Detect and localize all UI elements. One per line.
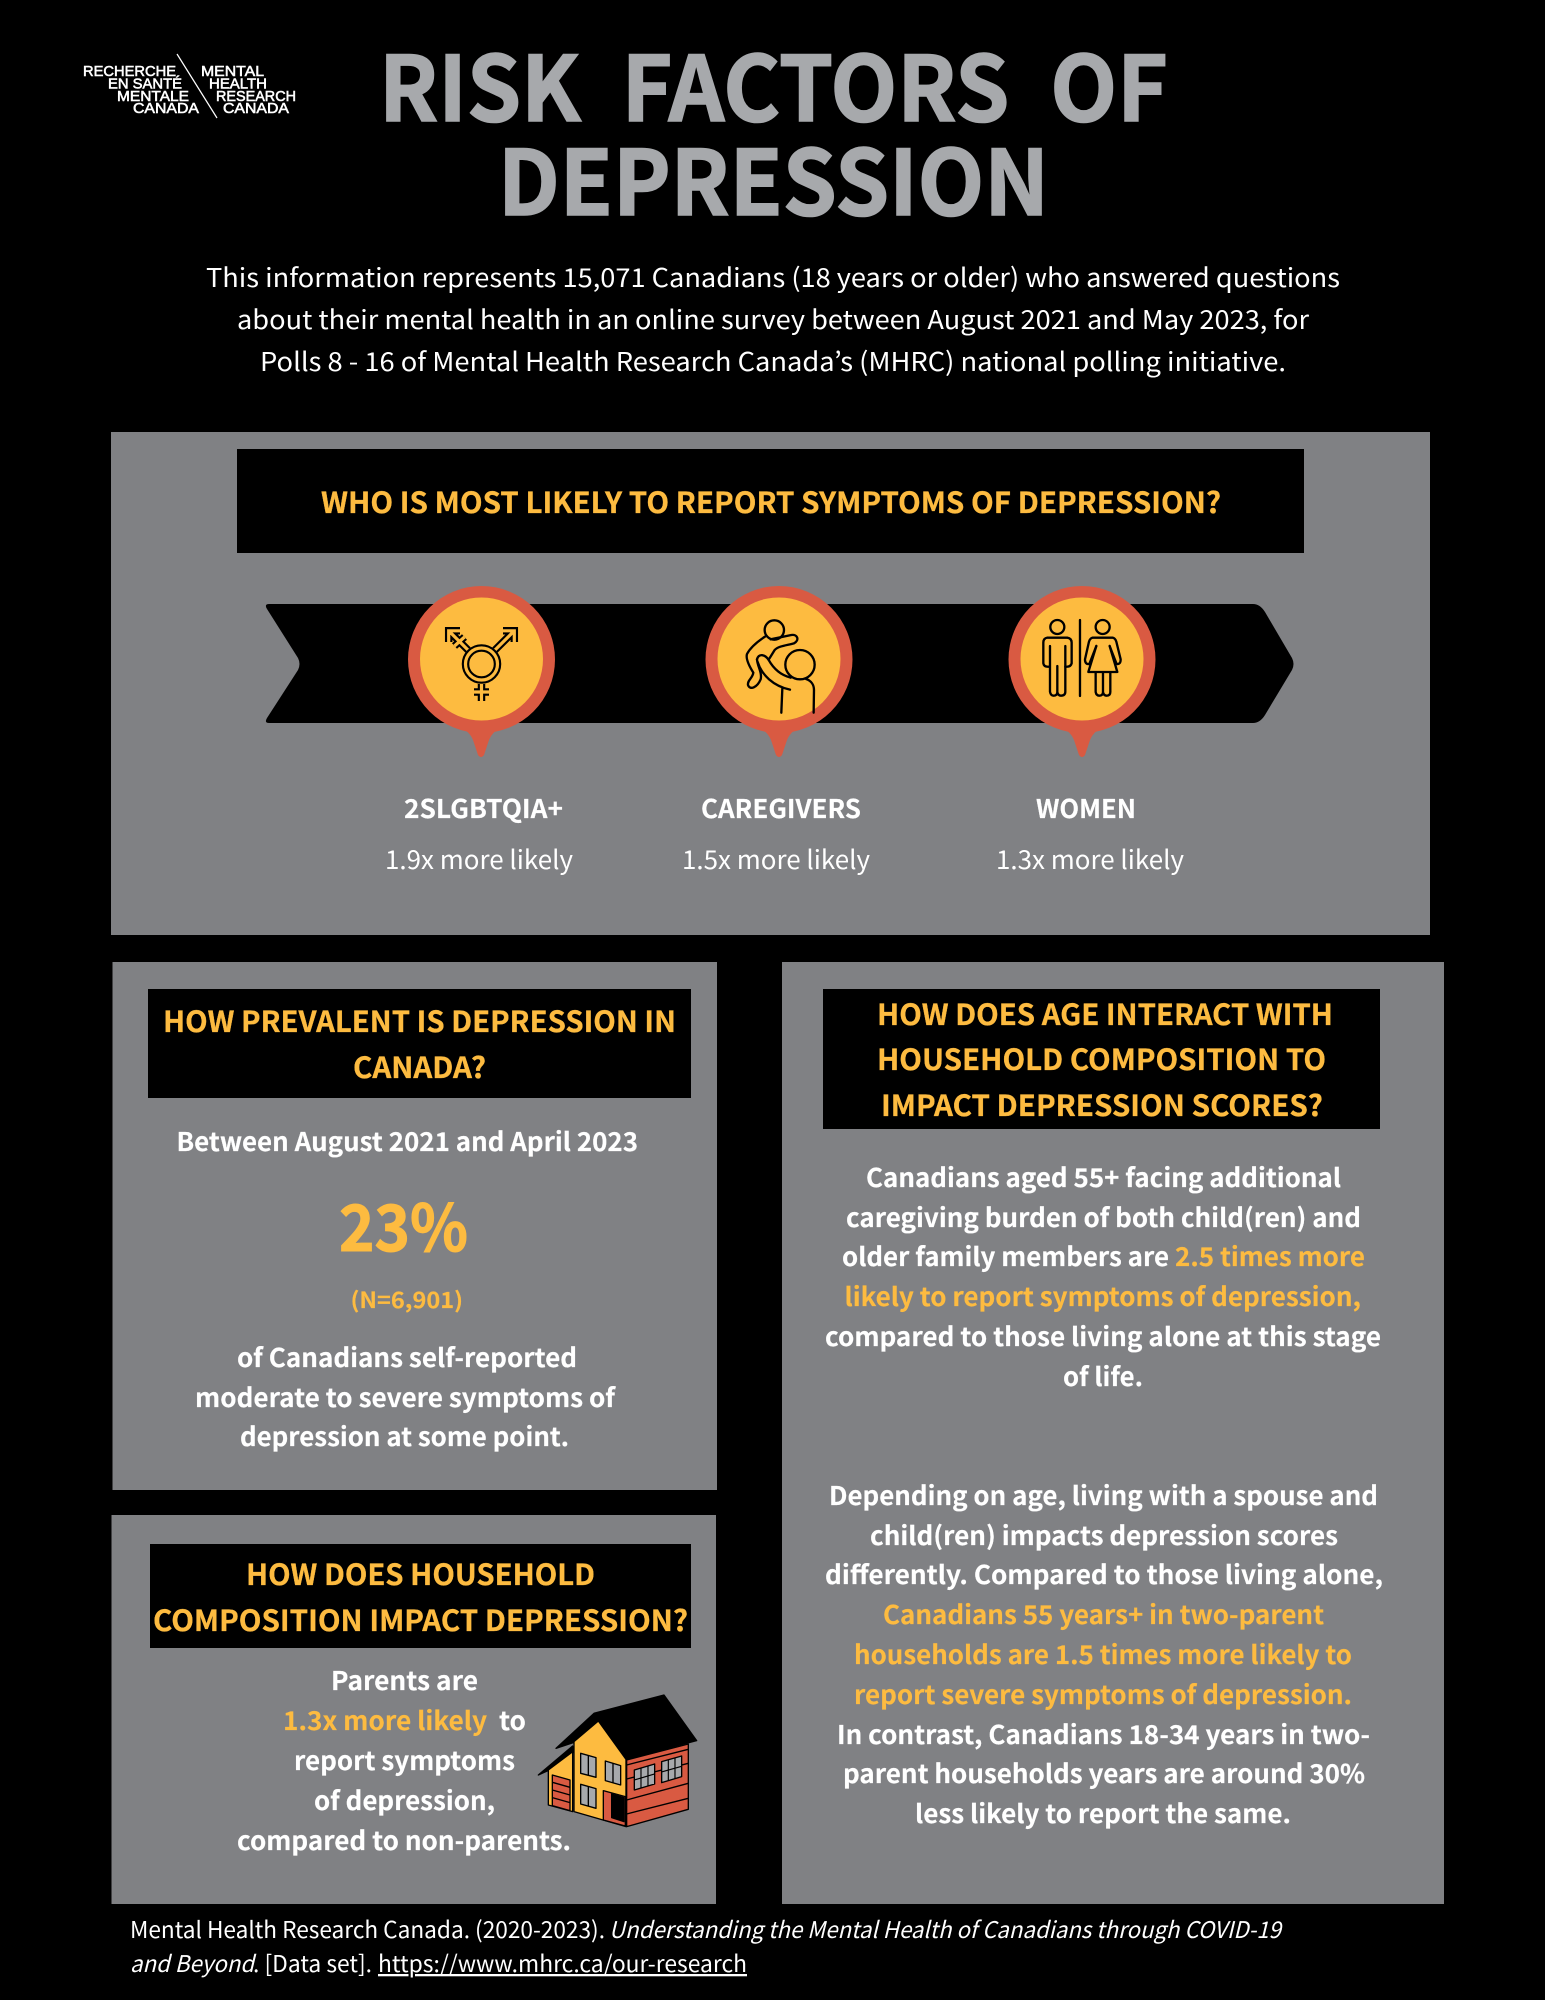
group label: 2SLGBTQIA+: [385, 789, 573, 877]
sample size: (N=6,901): [350, 1283, 463, 1315]
group label: women: WOMEN: [1036, 789, 1136, 826]
logo: Mental Health Research Canada: MENTALE: [117, 89, 189, 105]
parents text: 1.3x more likely: [283, 1701, 487, 1738]
group label: caregivers: CAREGIVERS: [701, 789, 861, 826]
paragraph: caregiving burden: 2.5 times more: [1175, 1237, 1365, 1274]
group label: 2SLGBTQIA+: 2SLGBTQIA+: [404, 789, 563, 826]
heading: household composition: [150, 1544, 691, 1648]
date range: Between August 2021 and April 2023: [176, 1122, 638, 1159]
panel: prevalence: [112, 962, 717, 1490]
parents text: [237, 1661, 571, 1858]
group label: women: 1.3x more likely: [996, 840, 1184, 877]
footer citation: https://www.mhrc.ca/our-research: [378, 1945, 747, 1979]
heading: age interaction: HOW DOES AGE INTERACT WITH: [877, 992, 1333, 1034]
intro text: Polls 8 - 16 of Mental Health Research Canada’s (MHRC) national polling initiative.: [260, 342, 1286, 379]
paragraph: two-parent households: parent households years are around 30%: [843, 1754, 1365, 1791]
paragraph: caregiving burden: older family members are: [842, 1237, 1169, 1274]
heading: age interaction: [823, 989, 1380, 1129]
logo: Mental Health Research Canada: MENTAL: [201, 64, 264, 80]
prevalence description: of Canadians self-reported: [237, 1338, 577, 1375]
paragraph: two-parent households: households are 1.5 times more likely to: [854, 1635, 1352, 1672]
footer citation: Understanding the Mental Health of Canadians through COVID-19: [609, 1911, 1284, 1945]
intro text: about their mental health in an online survey between August 2021 and May 2023, for: [237, 300, 1310, 337]
logo: Mental Health Research Canada: HEALTH: [209, 76, 267, 92]
paragraph: caregiving burden: Canadians aged 55+ facing additional: [866, 1158, 1341, 1195]
arrow banner: [266, 604, 1294, 723]
intro text: This information represents 15,071 Canadians (18 years or older) who answered questions: [206, 258, 1340, 295]
heading: who is most likely: WHO IS MOST LIKELY TO REPORT SYMPTOMS OF DEPRESSION?: [321, 480, 1221, 522]
group label: 2SLGBTQIA+: 1.9x more likely: [385, 840, 573, 877]
footer citation: and Beyond: [130, 1945, 257, 1979]
heading: household composition: HOW DOES HOUSEHOLD: [246, 1552, 595, 1594]
statistic: 23%: 23%: [339, 1178, 468, 1270]
icon: man and woman pin: [1008, 586, 1156, 757]
paragraph: two-parent households: Depending on age, living with a spouse and: [829, 1476, 1378, 1513]
panel: age and household: [782, 962, 1444, 1904]
paragraph: two-parent households: In contrast, Canadians 18-34 years in two-: [837, 1715, 1370, 1752]
heading: how prevalent: [148, 989, 691, 1098]
heading: age interaction: IMPACT DEPRESSION SCORES?: [881, 1083, 1323, 1125]
footer citation: [130, 1911, 1284, 1979]
intro text: [206, 258, 1340, 379]
paragraph: two-parent households: [825, 1476, 1383, 1831]
logo: Mental Health Research Canada: [83, 54, 296, 118]
parents text: compared to non-parents.: [237, 1821, 571, 1858]
paragraph: caregiving burden: likely to report symptoms of depression,: [844, 1277, 1361, 1314]
paragraph: caregiving burden: of life.: [1063, 1357, 1143, 1394]
group label: women: [996, 789, 1184, 877]
paragraph: two-parent households: report severe symptoms of depression.: [854, 1675, 1352, 1712]
heading: household composition: COMPOSITION IMPACT DEPRESSION?: [153, 1598, 688, 1640]
prevalence description: [195, 1338, 617, 1454]
group label: caregivers: 1.5x more likely: [682, 840, 870, 877]
parents text: report symptoms: [294, 1741, 515, 1778]
paragraph: two-parent households: less likely to report the same.: [915, 1794, 1291, 1831]
title: DEPRESSION: [498, 111, 1049, 241]
logo: Mental Health Research Canada: CANADA: [133, 101, 199, 117]
logo: Mental Health Research Canada: CANADA: [223, 101, 289, 117]
footer citation: . [Data set].: [253, 1945, 372, 1979]
icon: caregiver lifting child pin: [706, 586, 852, 757]
icon: transgender symbol pin: [408, 586, 555, 757]
prevalence description: moderate to severe symptoms of: [195, 1378, 617, 1415]
parents text: of depression,: [314, 1781, 495, 1818]
parents text: to: [499, 1701, 526, 1738]
logo: Mental Health Research Canada: EN SANTÉ: [108, 76, 182, 92]
heading: how prevalent: CANADA?: [353, 1045, 486, 1087]
panel: who is most likely: [111, 432, 1430, 935]
heading: how prevalent: HOW PREVALENT IS DEPRESSION IN: [163, 999, 676, 1041]
paragraph: caregiving burden: compared to those living alone at this stage: [825, 1317, 1381, 1354]
paragraph: two-parent households: differently. Compared to those living alone,: [825, 1555, 1383, 1592]
paragraph: caregiving burden: caregiving burden of both child(ren) and: [846, 1198, 1361, 1235]
paragraph: two-parent households: child(ren) impacts depression scores: [870, 1516, 1338, 1553]
footer citation: Mental Health Research Canada. (2020-2023).: [130, 1911, 605, 1945]
prevalence description: depression at some point.: [240, 1417, 569, 1454]
icon: house: [538, 1695, 697, 1827]
logo: Mental Health Research Canada: RECHERCHE: [83, 64, 176, 80]
panel: household composition: [112, 1515, 716, 1904]
paragraph: two-parent households: Canadians 55 years+ in two-parent: [883, 1595, 1324, 1632]
group label: caregivers: [682, 789, 870, 877]
heading: age interaction: HOUSEHOLD COMPOSITION TO: [877, 1037, 1326, 1079]
heading: who is most likely: [237, 449, 1304, 553]
title: RISK FACTORS OF: [379, 17, 1168, 147]
logo: Mental Health Research Canada: RESEARCH: [216, 89, 296, 105]
parents text: Parents are: [331, 1661, 478, 1698]
title: [379, 17, 1168, 241]
paragraph: caregiving burden: [825, 1158, 1381, 1394]
